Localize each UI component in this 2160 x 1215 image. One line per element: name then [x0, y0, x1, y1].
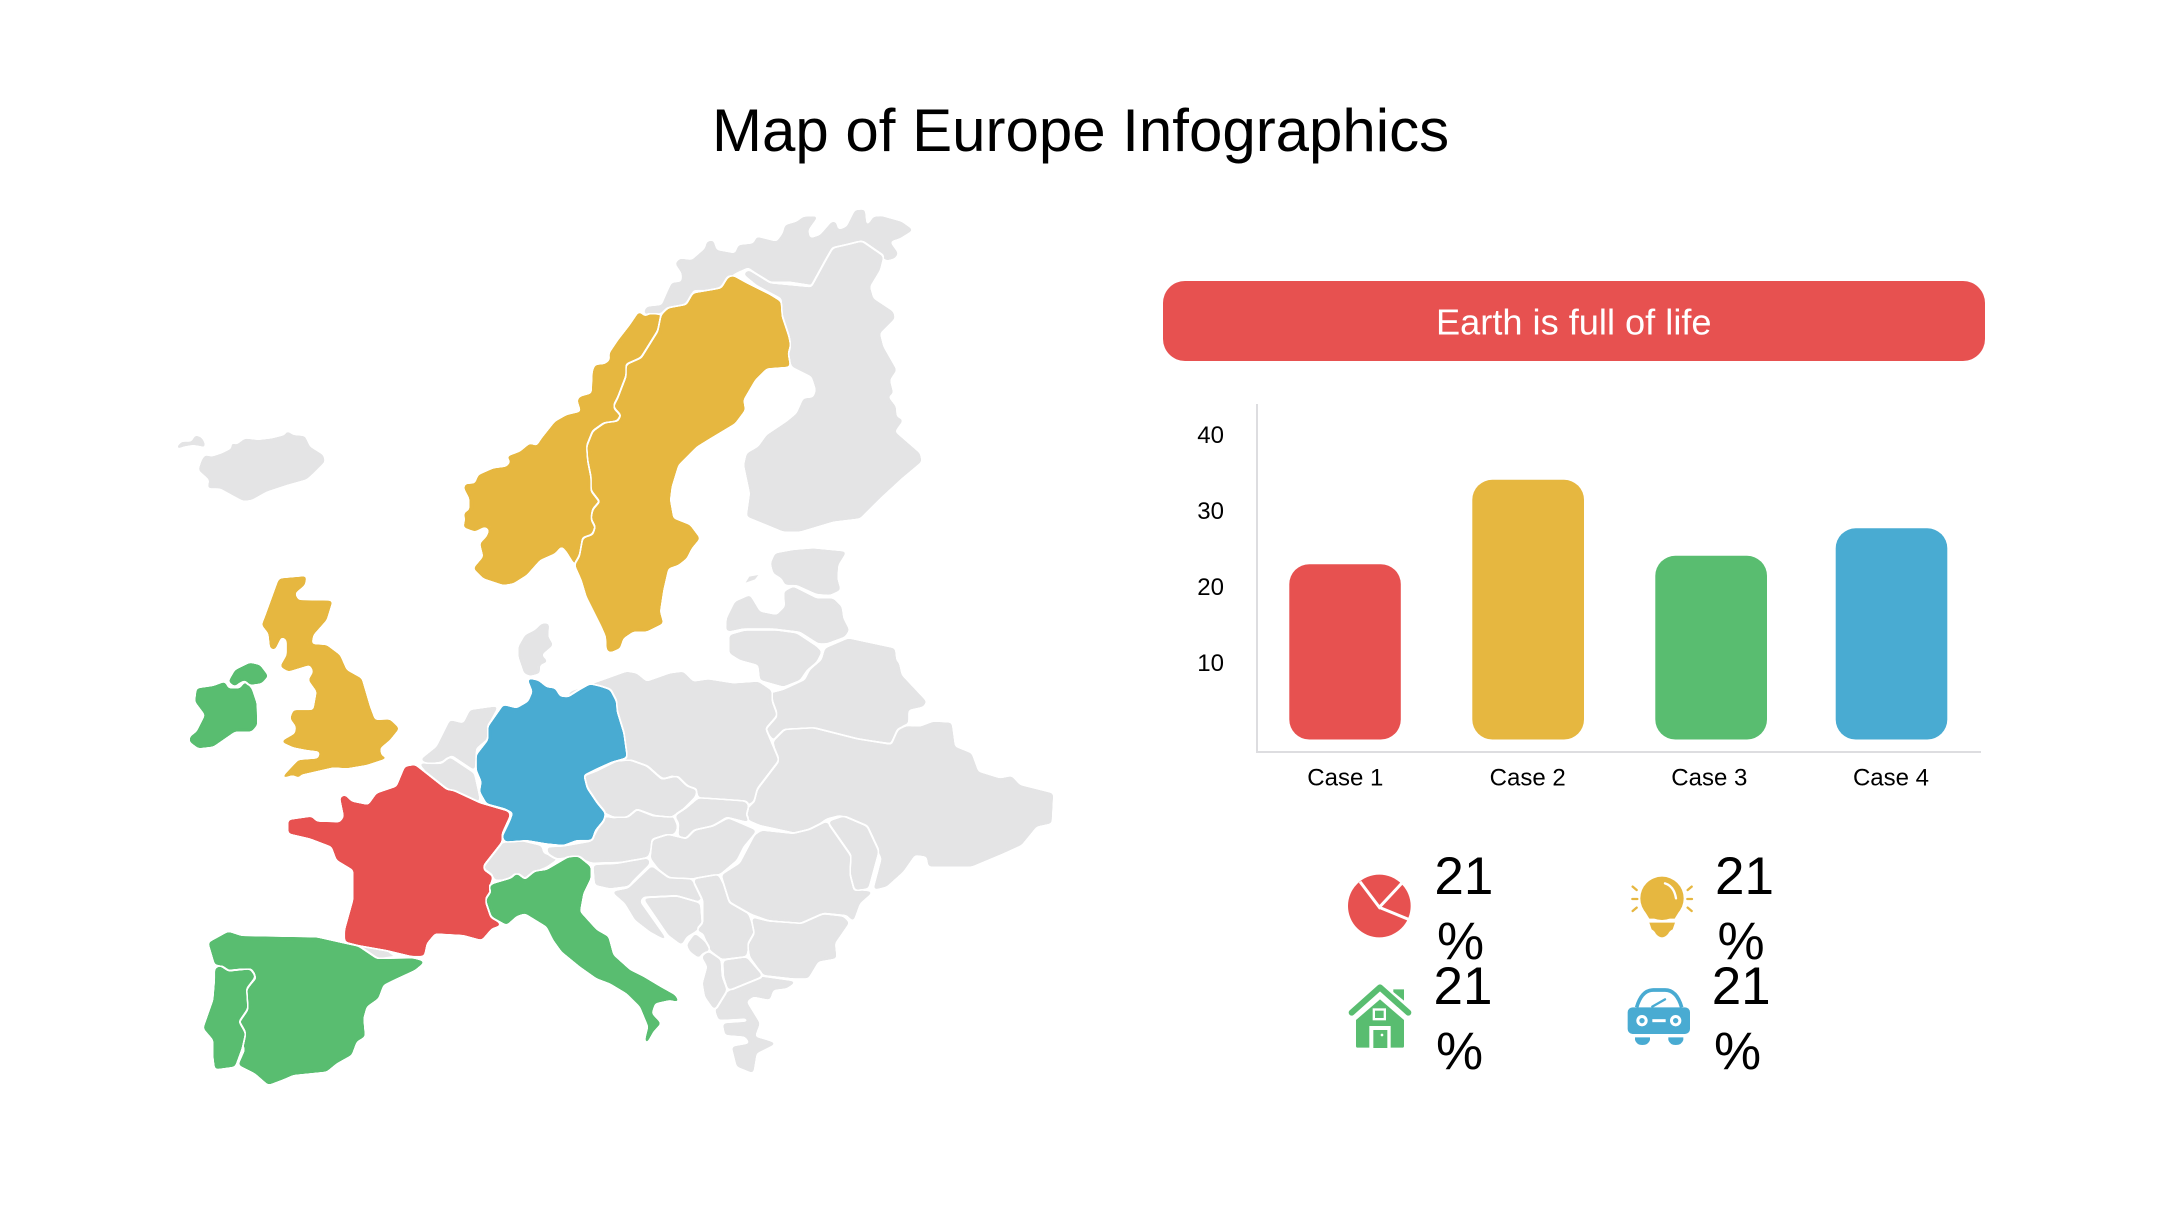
Latvia	[726, 587, 849, 643]
Romania	[722, 822, 873, 923]
x axis labels: Case 2	[1490, 764, 1566, 792]
x axis labels	[1307, 764, 1929, 792]
Northern Ireland	[228, 663, 268, 687]
y axis labels: 30	[1197, 498, 1224, 525]
x axis labels: Case 3	[1671, 764, 1747, 792]
bar chart	[1197, 404, 1981, 792]
value: %	[1436, 1022, 1483, 1081]
bar: Case 3	[1655, 556, 1767, 740]
icon: pie chart	[1348, 875, 1412, 937]
Croatia	[612, 866, 702, 942]
y axis labels: 40	[1197, 422, 1224, 449]
Montenegro	[687, 933, 710, 958]
Italy	[486, 857, 680, 1045]
Saaremaa	[746, 575, 758, 583]
Sweden	[575, 276, 790, 653]
y axis labels: 20	[1197, 574, 1224, 601]
Norway	[463, 312, 662, 585]
Estonia	[771, 548, 847, 595]
Poland	[567, 672, 778, 805]
Slovakia	[675, 798, 750, 838]
France	[288, 765, 510, 956]
bar: Case 1	[1289, 564, 1401, 740]
Austria	[547, 810, 677, 863]
value: 21	[1715, 847, 1774, 906]
grey countries: central	[418, 706, 697, 881]
bar: Case 2	[1472, 480, 1584, 740]
value: %	[1714, 1022, 1761, 1081]
bar: Case 4	[1836, 528, 1947, 740]
Ireland	[189, 682, 257, 748]
x axis labels: Case 4	[1853, 764, 1929, 792]
value: 21	[1712, 957, 1771, 1016]
Ukraine	[747, 722, 1053, 890]
icon: car	[1628, 990, 1690, 1045]
chart axes	[1257, 404, 1981, 752]
Moldova	[828, 817, 878, 890]
banner: Earth is full of life: Earth is full of life	[1436, 302, 1712, 342]
y axis labels: 10	[1197, 650, 1224, 677]
Iceland	[176, 431, 325, 501]
grey countries: north	[176, 431, 553, 676]
y axis labels	[1197, 422, 1224, 677]
map of Europe	[176, 209, 1053, 1085]
value: 21	[1434, 957, 1492, 1016]
highlighted countries: west and south	[189, 663, 680, 1085]
Czechia	[583, 761, 697, 817]
value: 21	[1434, 847, 1493, 906]
Lithuania	[729, 631, 822, 687]
icon: house	[1352, 987, 1408, 1048]
Greece	[715, 977, 797, 1073]
Serbia	[693, 875, 755, 959]
Portugal	[203, 966, 255, 1069]
grey: Andorra sliver	[358, 946, 393, 958]
stat: house icon with 21 %	[1352, 957, 1492, 1081]
Belgium	[418, 757, 480, 802]
title: Map of Europe Infographics	[712, 97, 1449, 164]
banner: Earth is full of life	[1163, 281, 1985, 361]
value: %	[1718, 912, 1765, 971]
Hungary	[651, 818, 757, 878]
United Kingdom	[262, 576, 399, 779]
grey countries: Balkans	[593, 798, 878, 1010]
stat: pie icon with 21 %	[1348, 847, 1493, 971]
Albania	[702, 952, 727, 1010]
stat: car icon with 21 %	[1628, 957, 1771, 1081]
icon: light bulb	[1632, 877, 1692, 937]
value: %	[1437, 912, 1484, 971]
Netherlands	[420, 706, 498, 771]
x axis labels: Case 1	[1307, 764, 1383, 792]
Belarus	[765, 638, 927, 743]
Bosnia	[643, 897, 702, 945]
Northern Norway	[643, 209, 913, 316]
grey countries: east	[567, 672, 1053, 1073]
grey countries: Nordic and Baltic	[643, 209, 927, 743]
highlighted yellow countries	[262, 276, 790, 779]
Spain	[208, 932, 425, 1085]
stat: bulb icon with 21 %	[1632, 847, 1774, 971]
Germany	[477, 678, 627, 845]
Finland	[743, 242, 922, 532]
Denmark	[518, 623, 553, 676]
Bulgaria	[748, 914, 849, 978]
Slovenia	[593, 858, 650, 888]
Switzerland	[482, 840, 558, 881]
North Macedonia	[723, 957, 763, 990]
